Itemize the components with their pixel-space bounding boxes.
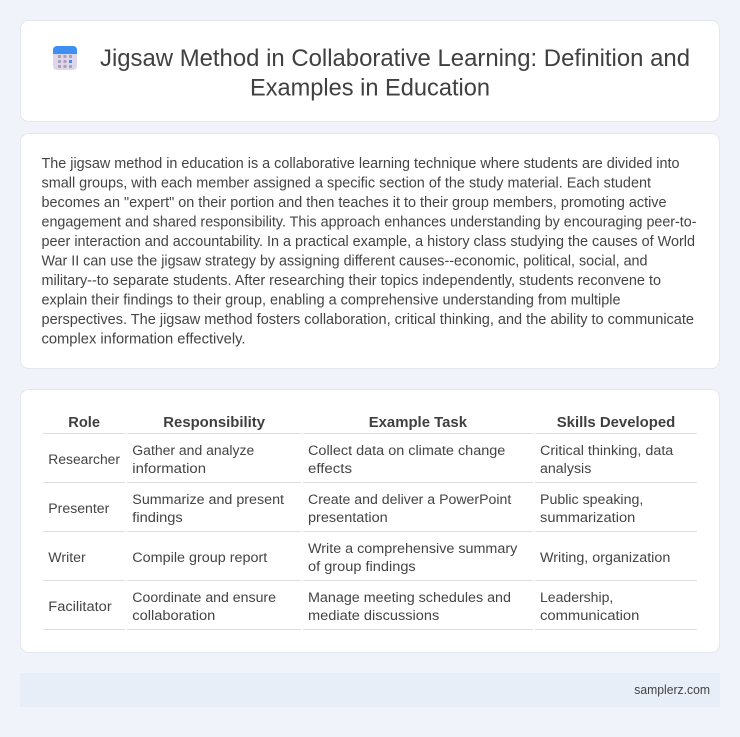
table row: facilitator: mediate discussions (308, 608, 439, 624)
footer bar (20, 673, 720, 707)
table row: facilitator: Coordinate and ensure (132, 590, 276, 606)
table row: facilitator: Facilitator (48, 599, 112, 615)
title: Jigsaw Method in Collaborative Learning: Definition and (100, 45, 690, 72)
table row: presenter: Public speaking, (540, 492, 643, 508)
table header row: Role (68, 414, 100, 431)
table row: presenter: Presenter (48, 501, 110, 517)
table header row (68, 414, 675, 431)
table row: researcher: analysis (540, 461, 591, 477)
description text block: The jigsaw method in education is a collaborative learning technique where students are divided into (42, 156, 680, 172)
description text block: becomes an "expert" on their portion and then teaches it to their group members, promoting active (42, 195, 666, 211)
table row: researcher (48, 443, 673, 477)
description text block: peer interaction and accountability. In a practical example, a history class studying the causes of World (42, 234, 695, 250)
table row: facilitator: Manage meeting schedules and (308, 590, 511, 606)
description text block: small groups, with each member assigned a specific section of the study material. Each student (42, 176, 651, 192)
table row: facilitator: communication (540, 608, 639, 624)
table row: presenter: presentation (308, 510, 388, 526)
description text block: explain their findings to their group, enabling a comprehensive understanding from multiple (42, 292, 620, 308)
description text block (42, 156, 697, 348)
title: Examples in Education (250, 74, 490, 102)
table row: presenter: summarization (540, 510, 635, 526)
table row: researcher: information (132, 461, 206, 477)
description text block: War II can use the jigsaw strategy by assigning different causes--economic, political, social, and (42, 254, 648, 270)
table row: presenter: Summarize and present (132, 492, 284, 508)
table row: writer: of group findings (308, 559, 416, 575)
panel: roles table (20, 390, 720, 652)
description text block: complex information effectively. (42, 332, 246, 348)
table row: presenter (48, 492, 643, 526)
header panel (20, 20, 720, 122)
table header row: Skills Developed (557, 414, 675, 431)
table row: writer (48, 541, 670, 575)
title (100, 45, 690, 102)
table row: researcher: Gather and analyze (132, 443, 254, 459)
table row: researcher: Researcher (48, 452, 120, 468)
table header row: Example Task (369, 414, 468, 431)
description text block: perspectives. The jigsaw method fosters collaboration, critical thinking, and the ability to communicate (42, 312, 694, 328)
icon: calendar grid (53, 46, 77, 70)
panel: description (20, 134, 720, 368)
table row: writer: Compile group report (132, 550, 267, 566)
table header row: Responsibility (163, 414, 266, 431)
table row: presenter: Create and deliver a PowerPoint (308, 492, 511, 508)
table row: researcher: effects (308, 461, 352, 477)
table row: researcher: Collect data on climate change (308, 443, 505, 459)
footer source text: samplerz.com (634, 683, 710, 697)
table row: presenter: findings (132, 510, 183, 526)
table row: writer: Writer (48, 550, 86, 566)
description text block: military--to separate students. After researching their topics independently, students reconvene to (42, 273, 661, 289)
table row: facilitator: collaboration (132, 608, 215, 624)
table row: facilitator: Leadership, (540, 590, 613, 606)
table row: writer: Writing, organization (540, 550, 670, 566)
table row: writer: Write a comprehensive summary (308, 541, 518, 557)
table row: facilitator (48, 590, 639, 624)
table row: researcher: Critical thinking, data (540, 443, 673, 459)
description text block: engagement and shared responsibility. This approach enhances understanding by encouraging peer-to- (42, 214, 697, 230)
